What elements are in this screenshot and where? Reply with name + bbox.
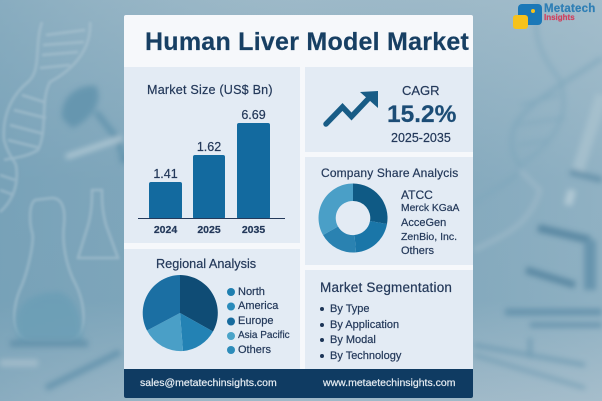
heading: regional analysis: Regional Analysis — [156, 257, 256, 271]
footer band — [124, 369, 473, 398]
legend: regions — [238, 286, 290, 356]
legend: companies: Others — [401, 245, 434, 257]
icon: trend arrow — [323, 91, 378, 127]
contact email: sales@metatechinsights.com — [140, 377, 277, 389]
heading: market size: Market Size (US$ Bn) — [147, 83, 273, 97]
panel: company share — [305, 157, 473, 265]
bar chart — [138, 108, 285, 236]
icon: logo squares — [513, 4, 542, 29]
heading: company share: Company Share Analycis — [321, 166, 458, 180]
list: segments — [320, 303, 402, 362]
logo wordmark: Metatech — [544, 3, 595, 15]
logo: Metatech Insights — [513, 2, 595, 29]
heading: CAGR: CAGR — [402, 83, 440, 98]
heading: market segmentation: Market Segmentation — [320, 280, 452, 295]
bar chart: 1.62 — [197, 140, 221, 154]
legend: companies: ZenBio, Inc. — [401, 231, 457, 243]
title: Human Liver Model Market — [145, 28, 469, 56]
bar chart: 1.41 — [153, 167, 178, 181]
figure: CAGR value: 15.2% — [387, 101, 456, 128]
list: segments: By Modal — [330, 334, 376, 346]
panel: market size — [124, 67, 300, 243]
panel: market segmentation — [305, 270, 473, 369]
bar chart: 2024 — [154, 224, 177, 236]
list: segments: By Type — [330, 303, 370, 315]
legend: regions: Asia Pacific — [238, 330, 290, 341]
bar chart: 2025 — [197, 224, 221, 236]
legend: companies: AcceGen — [401, 217, 446, 229]
website: www.metaetechinsights.com — [323, 377, 455, 389]
legend: regions: Others — [238, 344, 271, 356]
panel: regional analysis — [124, 249, 300, 369]
legend: companies: Merck KGaA — [401, 203, 459, 214]
pie chart — [142, 275, 235, 354]
label: CAGR period: 2025-2035 — [391, 131, 451, 145]
legend: regions: Europe — [238, 315, 273, 327]
main card — [124, 15, 473, 398]
legend: companies — [400, 188, 460, 257]
legend: regions: America — [238, 300, 278, 312]
legend: companies: ATCC — [401, 188, 433, 202]
bar chart: 6.69 — [241, 108, 266, 122]
list: segments: By Application — [330, 319, 399, 331]
list: segments: By Technology — [330, 350, 401, 362]
panel: CAGR — [305, 67, 473, 152]
donut chart — [318, 184, 388, 252]
bar chart: 2035 — [242, 224, 265, 236]
legend: regions: North — [238, 286, 265, 298]
logo subtitle: Insights — [544, 13, 575, 22]
